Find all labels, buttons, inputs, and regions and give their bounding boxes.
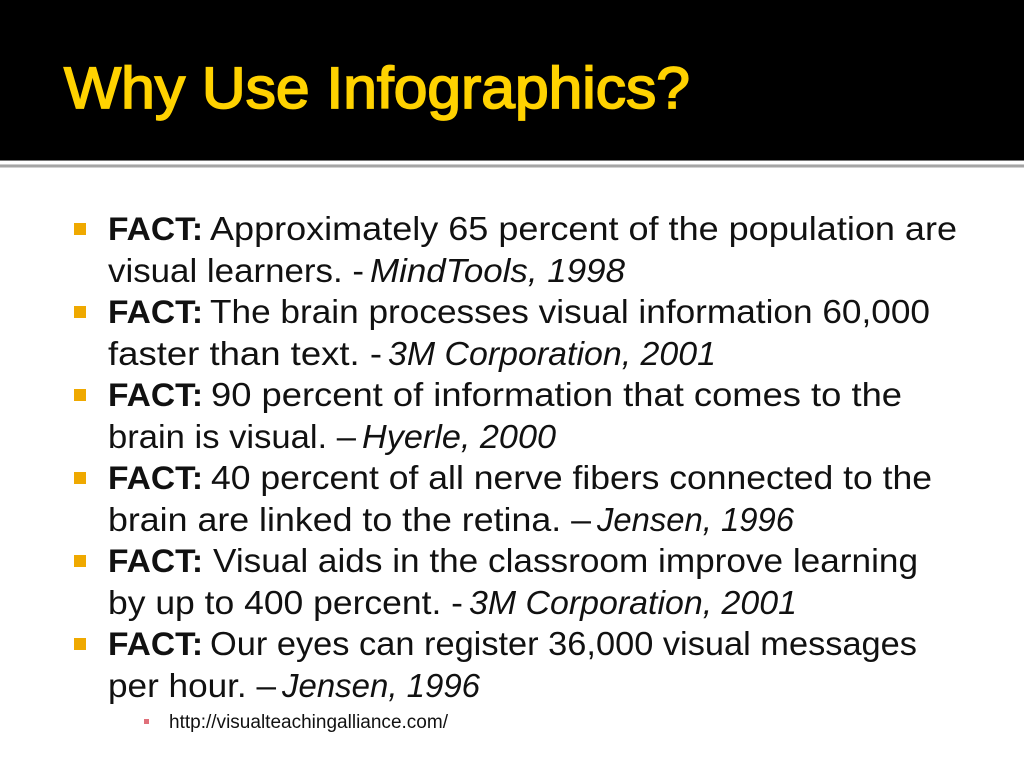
fact 1: MindTools, 1998 [370, 252, 626, 289]
fact 5 [74, 542, 918, 621]
fact 5: by up to 400 percent. - [108, 584, 463, 621]
fact 3: FACT: [108, 377, 203, 413]
header band [0, 0, 1024, 168]
fact 6: Jensen, 1996 [281, 667, 481, 704]
fact 1 [74, 210, 957, 289]
fact 6: Our eyes can register 36,000 visual messages [210, 625, 917, 662]
fact 4: FACT: [108, 460, 203, 496]
fact 6 [74, 625, 917, 704]
fact 4: 40 percent of all nerve fibers connected to the [211, 459, 932, 496]
fact 2: faster than text. - [108, 335, 382, 372]
fact 4 [74, 459, 932, 538]
fact 5: FACT: [108, 543, 203, 579]
fact 4: Jensen, 1996 [596, 501, 795, 538]
fact 6: per hour. – [108, 667, 277, 704]
fact 2: The brain processes visual information 60,000 [210, 293, 930, 330]
fact 6: FACT: [108, 626, 203, 662]
fact 1: FACT: [108, 211, 203, 247]
fact 2: FACT: [108, 294, 203, 330]
fact 1: Approximately 65 percent of the population are [210, 210, 957, 247]
title: Why Use Infographics? [64, 56, 690, 121]
fact 3: brain is visual. – [108, 418, 357, 455]
fact 4: brain are linked to the retina. – [108, 501, 592, 538]
fact 5: Visual aids in the classroom improve learning [213, 542, 918, 579]
fact 1: visual learners. - [108, 252, 364, 289]
source link: http://visualteachingalliance.com/ [169, 712, 449, 733]
fact 3: 90 percent of information that comes to the [211, 376, 902, 413]
fact 5: 3M Corporation, 2001 [469, 584, 797, 621]
fact 3: Hyerle, 2000 [362, 418, 557, 455]
fact 2 [74, 293, 930, 372]
fact 2: 3M Corporation, 2001 [388, 335, 716, 372]
fact 3 [74, 376, 902, 455]
